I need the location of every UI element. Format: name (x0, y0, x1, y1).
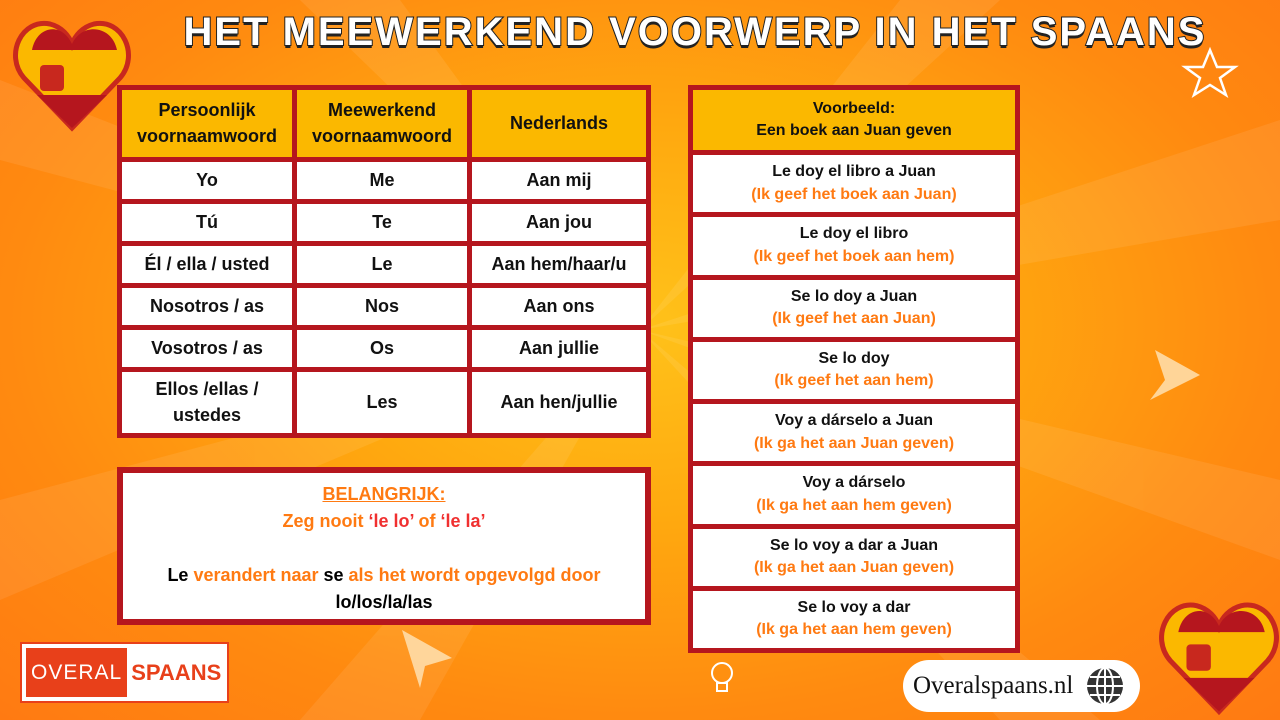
table: examples: Se lo voy a dar (798, 599, 910, 616)
table: examples: (Ik ga het aan hem geven) (756, 497, 952, 514)
callout: belangrijk: Le verandert naar se als het wordt opgevolgd door (167, 565, 601, 585)
logo: Overal Spaans: SPAANS (131, 660, 221, 684)
table: pronouns: ustedes (173, 404, 241, 424)
table: examples: (Ik geef het boek aan hem) (754, 248, 954, 265)
table: pronouns: Me (369, 170, 394, 190)
table: pronouns: voornaamwoord (137, 126, 277, 146)
table: examples: Le doy el libro a Juan (772, 163, 936, 180)
icon: star (1181, 46, 1239, 98)
table: examples: (Ik geef het aan hem) (774, 372, 934, 389)
table: examples: Een boek aan Juan geven (756, 122, 952, 139)
callout: belangrijk: BELANGRIJK: (322, 484, 446, 504)
table: examples: Se lo doy (818, 350, 890, 367)
table: pronouns: Persoonlijk (158, 100, 256, 120)
table: examples: (Ik geef het boek aan Juan) (751, 186, 957, 203)
icon: heart flag top-left (13, 20, 131, 132)
icon: paper plane bottom (402, 630, 452, 688)
table: pronouns: Aan ons (523, 296, 594, 316)
callout: belangrijk: lo/los/la/las (335, 592, 433, 612)
table: examples: Voorbeeld: (813, 100, 895, 117)
table: examples: (Ik ga het aan hem geven) (756, 621, 952, 638)
url pill: Overalspaans.nl (913, 672, 1073, 699)
table: examples: Voy a dárselo a Juan (775, 412, 933, 429)
table: examples: Se lo voy a dar a Juan (770, 537, 938, 554)
table: pronouns: Le (371, 254, 392, 274)
table: pronouns: Aan mij (526, 170, 592, 190)
table: pronouns: Tú (196, 212, 218, 232)
table: examples: (Ik ga het aan Juan geven) (754, 435, 954, 452)
table: pronouns: Nosotros / as (150, 296, 264, 316)
table: pronouns: Aan jullie (519, 338, 599, 358)
table: pronouns: Aan hem/haar/u (491, 254, 627, 274)
logo: Overal Spaans (20, 642, 229, 703)
url pill (903, 660, 1140, 712)
icon: paper plane right (1150, 350, 1200, 400)
title: HET MEEWERKEND VOORWERP IN HET SPAANS (184, 10, 1206, 54)
table: pronouns: Vosotros / as (151, 338, 263, 358)
callout: belangrijk: Zeg nooit ‘le lo’ of ‘le la’ (282, 511, 486, 531)
table: examples: (Ik ga het aan Juan geven) (754, 559, 954, 576)
table: pronouns: Ellos /ellas / (155, 379, 259, 399)
table: pronouns (117, 85, 651, 438)
table: pronouns: Les (366, 392, 398, 412)
logo: Overal Spaans: OVERAL (31, 660, 122, 684)
table: pronouns: Os (370, 338, 394, 358)
table: examples (688, 85, 1020, 653)
table: pronouns: Aan hen/jullie (500, 392, 618, 412)
table: pronouns: Meewerkend (328, 100, 436, 120)
table: pronouns: Te (372, 212, 392, 232)
table: pronouns: Yo (196, 170, 218, 190)
table: pronouns: Aan jou (526, 212, 592, 232)
table: examples: Le doy el libro (800, 225, 908, 242)
table: examples: Voy a dárselo (803, 474, 905, 491)
table: pronouns: Él / ella / usted (144, 254, 270, 274)
icon: heart flag bottom-right (1159, 602, 1279, 715)
table: pronouns: Nederlands (510, 113, 608, 133)
callout: belangrijk (117, 467, 651, 625)
table: examples: (Ik geef het aan Juan) (772, 310, 936, 327)
table: examples: Se lo doy a Juan (791, 288, 917, 305)
icon: lightbulb (711, 662, 733, 692)
table: pronouns: voornaamwoord (312, 126, 452, 146)
table: pronouns: Nos (365, 296, 399, 316)
